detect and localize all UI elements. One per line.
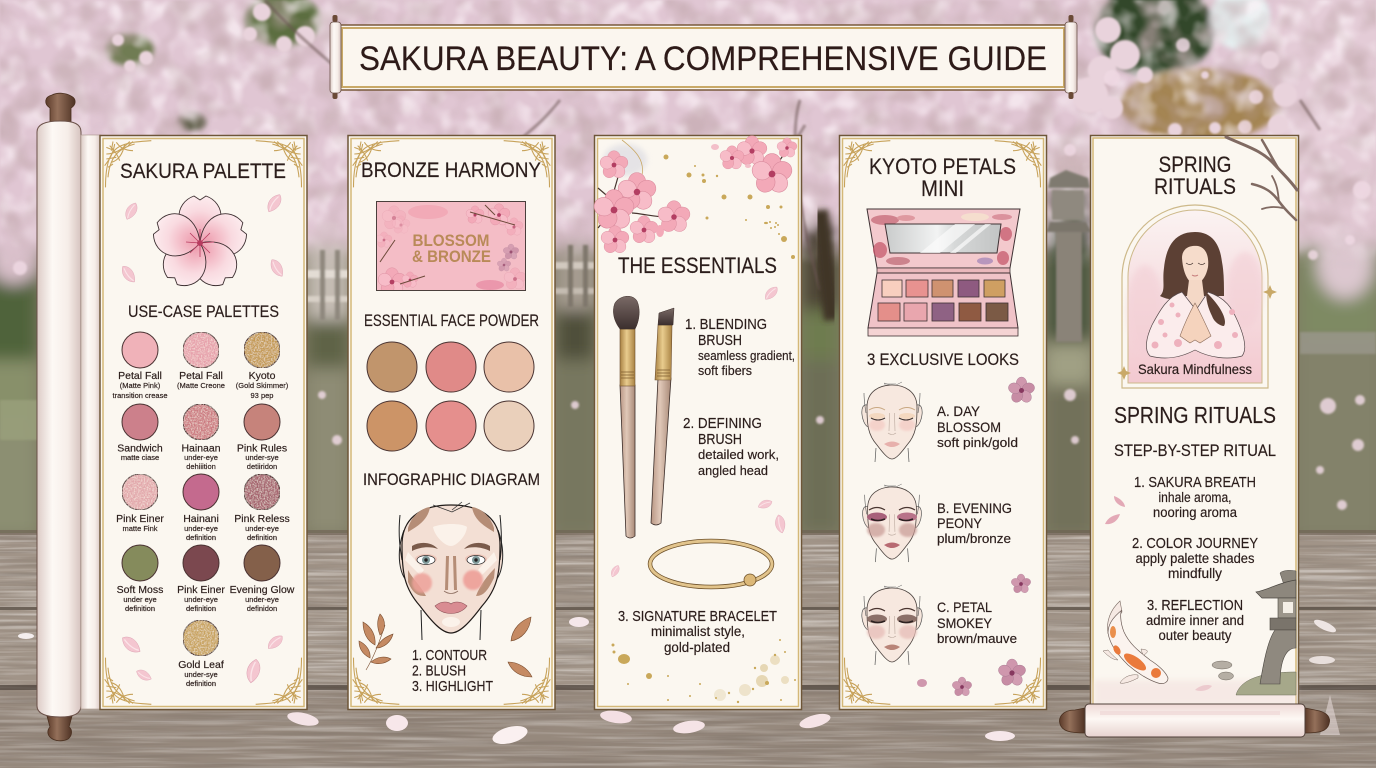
banner left roller <box>330 15 341 99</box>
compact: Blossom & Bronze: BLOSSOM <box>412 232 490 250</box>
petals around flower <box>119 192 286 285</box>
look: Day Blossom: soft pink/gold <box>937 435 1018 450</box>
heading: Spring Rituals top <box>1154 152 1236 199</box>
swatch: Gold Leaf <box>178 620 224 688</box>
bottom scroll roller <box>1060 704 1330 737</box>
swatch: Sandwich: matte ciase <box>121 453 159 462</box>
text: signature bracelet: 3. SIGNATURE BRACELET <box>618 608 777 625</box>
background: wooden deck <box>0 530 1376 768</box>
look: Day Blossom: BLOSSOM <box>937 419 1001 435</box>
swatch: Petal Fall matte pink: Petal Fall <box>118 370 162 382</box>
swatch: Soft Moss: Soft Moss <box>117 584 163 596</box>
look: Day Blossom: A. DAY <box>937 403 981 419</box>
swatch: Kyoto gold shimmer: 93 pep <box>251 391 273 400</box>
icon: sakura flower <box>149 196 251 293</box>
text: blending brush: seamless gradient, <box>698 348 795 363</box>
swatch: Pink Einer matte: matte Fink <box>122 524 158 533</box>
look: Evening Peony: B. EVENING <box>937 500 1012 516</box>
look: Petal Smokey: SMOKEY <box>937 615 993 631</box>
petals mid <box>609 498 786 578</box>
swatch: Pink Einer dark: definition <box>186 604 216 613</box>
swatch: Pink Einer dark <box>177 545 225 613</box>
swatch: Pink Reless: under-eye <box>245 524 279 533</box>
text: blending brush: 1. BLENDING <box>685 316 767 333</box>
heading: Kyoto Petals Mini: KYOTO PETALS <box>869 154 1016 179</box>
icon: stepping stones <box>1212 661 1234 680</box>
swatch: Gold Leaf: under-sye <box>184 670 218 679</box>
compact: Blossom & Bronze <box>375 202 527 297</box>
heading: Spring Rituals top: RITUALS <box>1154 174 1236 199</box>
diagram: face contour map <box>399 502 503 640</box>
illustration: meditating woman in arch: Sakura Mindfulness <box>1138 362 1252 377</box>
petals <box>1105 496 1212 691</box>
swatch: Gold Leaf: Gold Leaf <box>178 659 224 671</box>
step 1 <box>1134 474 1256 520</box>
swatch: Soft Moss: definition <box>125 604 155 613</box>
swatch: Hainaan: dehiiition <box>186 462 216 471</box>
panel: The Essentials <box>592 136 802 710</box>
swatch: Petal Fall matte pink <box>112 332 168 400</box>
swatch: Soft Moss: under eye <box>123 595 157 604</box>
text: defining brush: detailed work, <box>698 447 779 462</box>
swatch: Pink Einer matte: Pink Einer <box>116 513 164 525</box>
look: Petal Smokey: brown/mauve <box>937 631 1017 646</box>
heading: Essential Face Powder: ESSENTIAL FACE POWDER <box>364 312 539 330</box>
swatch: Kyoto gold shimmer <box>236 332 289 400</box>
icon: tree branches <box>1226 137 1297 220</box>
swatch: Hainani: definition <box>186 533 216 542</box>
steps list: 1. CONTOUR <box>412 647 487 664</box>
swatch: Kyoto gold shimmer: Kyoto <box>249 370 276 382</box>
swatch: Petal Fall matte crepe: (Matte Creone <box>177 381 225 390</box>
flower accents <box>917 377 1036 697</box>
step 2: mindfully <box>1168 566 1222 581</box>
icon: defining brush <box>651 308 674 525</box>
banner right roller <box>1065 15 1077 99</box>
swatch: Soft Moss <box>117 545 163 613</box>
title: SAKURA BEAUTY: A COMPREHENSIVE GUIDE <box>359 40 1047 78</box>
swatch: Hainani <box>183 474 219 542</box>
step 2 <box>1132 535 1258 581</box>
heading: Kyoto Petals Mini <box>869 154 1016 201</box>
swatch: Pink Einer matte <box>116 474 164 533</box>
text: blending brush: BRUSH <box>698 332 742 349</box>
step 3: outer beauty <box>1158 628 1232 643</box>
swatch: Pink Rules: Pink Rules <box>237 442 287 454</box>
swatch: Hainaan <box>181 404 221 471</box>
swatch: Pink Einer dark: under-eye <box>184 595 218 604</box>
look: Petal Smokey: C. PETAL <box>937 599 992 615</box>
panel: Sakura Palette <box>100 136 307 710</box>
icon: stone lantern <box>1236 570 1296 695</box>
swatch: Pink Reless: definition <box>247 533 277 542</box>
heading: Step-by-step ritual: STEP-BY-STEP RITUAL <box>1114 441 1276 460</box>
text: blending brush <box>685 316 795 378</box>
heading: Bronze Harmony: BRONZE HARMONY <box>361 159 541 182</box>
panel: Bronze Harmony <box>348 136 555 710</box>
swatch: Petal Fall matte crepe <box>177 332 225 390</box>
heading: Use-case palettes: USE-CASE PALETTES <box>128 302 279 321</box>
leaves <box>359 614 532 677</box>
icon: open eyeshadow palette <box>867 209 1020 336</box>
swatch: Pink Rules: detiiridon <box>247 462 277 471</box>
step 2: 2. COLOR JOURNEY <box>1132 535 1258 552</box>
text: defining brush: angled head <box>698 463 768 478</box>
title banner scroll <box>330 15 1077 99</box>
heading: Spring Rituals top: SPRING <box>1158 152 1232 177</box>
swatch: Kyoto gold shimmer: (Gold Skimmer) <box>236 381 289 390</box>
step 3 <box>1146 597 1244 643</box>
left scroll roller <box>37 93 101 741</box>
swatch: Sandwich <box>117 404 163 462</box>
text: signature bracelet: gold-plated <box>664 640 730 655</box>
swatch: Evening Glow: Evening Glow <box>230 584 295 596</box>
heading: Spring Rituals: SPRING RITUALS <box>1114 402 1276 428</box>
gold dots <box>664 154 795 259</box>
illustration: meditating woman in arch <box>1117 205 1277 388</box>
heading: 3 Exclusive Looks: 3 EXCLUSIVE LOOKS <box>867 350 1019 369</box>
swatch: Evening Glow <box>230 545 295 613</box>
swatch: Sandwich: Sandwich <box>117 442 163 454</box>
blossoms top right <box>711 136 798 196</box>
look: Evening Peony: PEONY <box>937 515 983 531</box>
blossoms top left <box>592 151 692 255</box>
powder swatches <box>367 342 534 451</box>
steps list: 3. HIGHLIGHT <box>412 678 493 695</box>
text: defining brush <box>683 415 779 478</box>
swatch: Pink Reless <box>234 474 290 542</box>
step 3: 3. REFLECTION <box>1147 597 1243 614</box>
swatch: Hainani: Hainani <box>183 513 219 525</box>
text: signature bracelet: minimalist style, <box>651 624 745 639</box>
look: Evening Peony <box>863 484 1012 562</box>
swatch: Evening Glow: definidon <box>247 604 277 613</box>
swatch: Evening Glow: under-eye <box>245 595 279 604</box>
swatch: Hainaan: under-eye <box>184 453 218 462</box>
background: blurred cherry trees, pond and bridge <box>0 0 1376 550</box>
step 3: admire inner and <box>1146 613 1244 628</box>
swatch: Gold Leaf: definition <box>186 679 216 688</box>
step 1: 1. SAKURA BREATH <box>1134 474 1256 491</box>
deck petals <box>18 617 1340 747</box>
swatch: Petal Fall matte pink: transition crease <box>112 391 168 400</box>
step 2: apply palette shades <box>1136 551 1255 566</box>
wash at bottom <box>1094 680 1296 706</box>
text: signature bracelet <box>618 608 777 655</box>
step 1: nooring aroma <box>1153 505 1237 520</box>
swatch: Pink Reless: Pink Reless <box>234 513 290 525</box>
swatch: Petal Fall matte pink: (Matte Pink) <box>120 381 161 390</box>
swatch: Pink Einer dark: Pink Einer <box>177 584 225 596</box>
heading: Sakura Palette: SAKURA PALETTE <box>120 160 286 183</box>
steps list <box>412 647 493 695</box>
swatch: Hainaan: Hainaan <box>181 442 221 454</box>
panel: Kyoto Petals Mini <box>840 136 1046 710</box>
icon: gold bracelet <box>650 541 772 587</box>
lower petals <box>119 633 285 684</box>
look: Day Blossom <box>862 382 1018 462</box>
icon: blending brush <box>613 296 639 538</box>
panel: Spring Rituals <box>1090 136 1298 708</box>
look: Petal Smokey <box>862 585 1017 665</box>
look: Evening Peony: plum/bronze <box>937 531 1011 546</box>
swatch: Petal Fall matte crepe: Petal Fall <box>179 370 223 382</box>
text: blending brush: soft fibers <box>698 363 752 378</box>
steps list: 2. BLUSH <box>412 662 466 680</box>
swatch: Pink Rules <box>237 404 287 471</box>
swatch: Hainani: under-eye <box>184 524 218 533</box>
icon: koi fish <box>1103 601 1168 684</box>
text: defining brush: BRUSH <box>698 431 742 448</box>
compact: Blossom & Bronze: & BRONZE <box>412 248 491 266</box>
heading: Infographic Diagram: INFOGRAPHIC DIAGRAM <box>363 470 540 489</box>
heading: Kyoto Petals Mini: MINI <box>921 176 964 201</box>
heading: The Essentials: THE ESSENTIALS <box>618 253 777 278</box>
gold flakes <box>612 639 796 703</box>
step 1: inhale aroma, <box>1158 490 1232 505</box>
watercolor wash and gold line <box>603 140 647 195</box>
text: defining brush: 2. DEFINING <box>683 415 762 432</box>
swatch: Pink Rules: under-sye <box>245 453 279 462</box>
